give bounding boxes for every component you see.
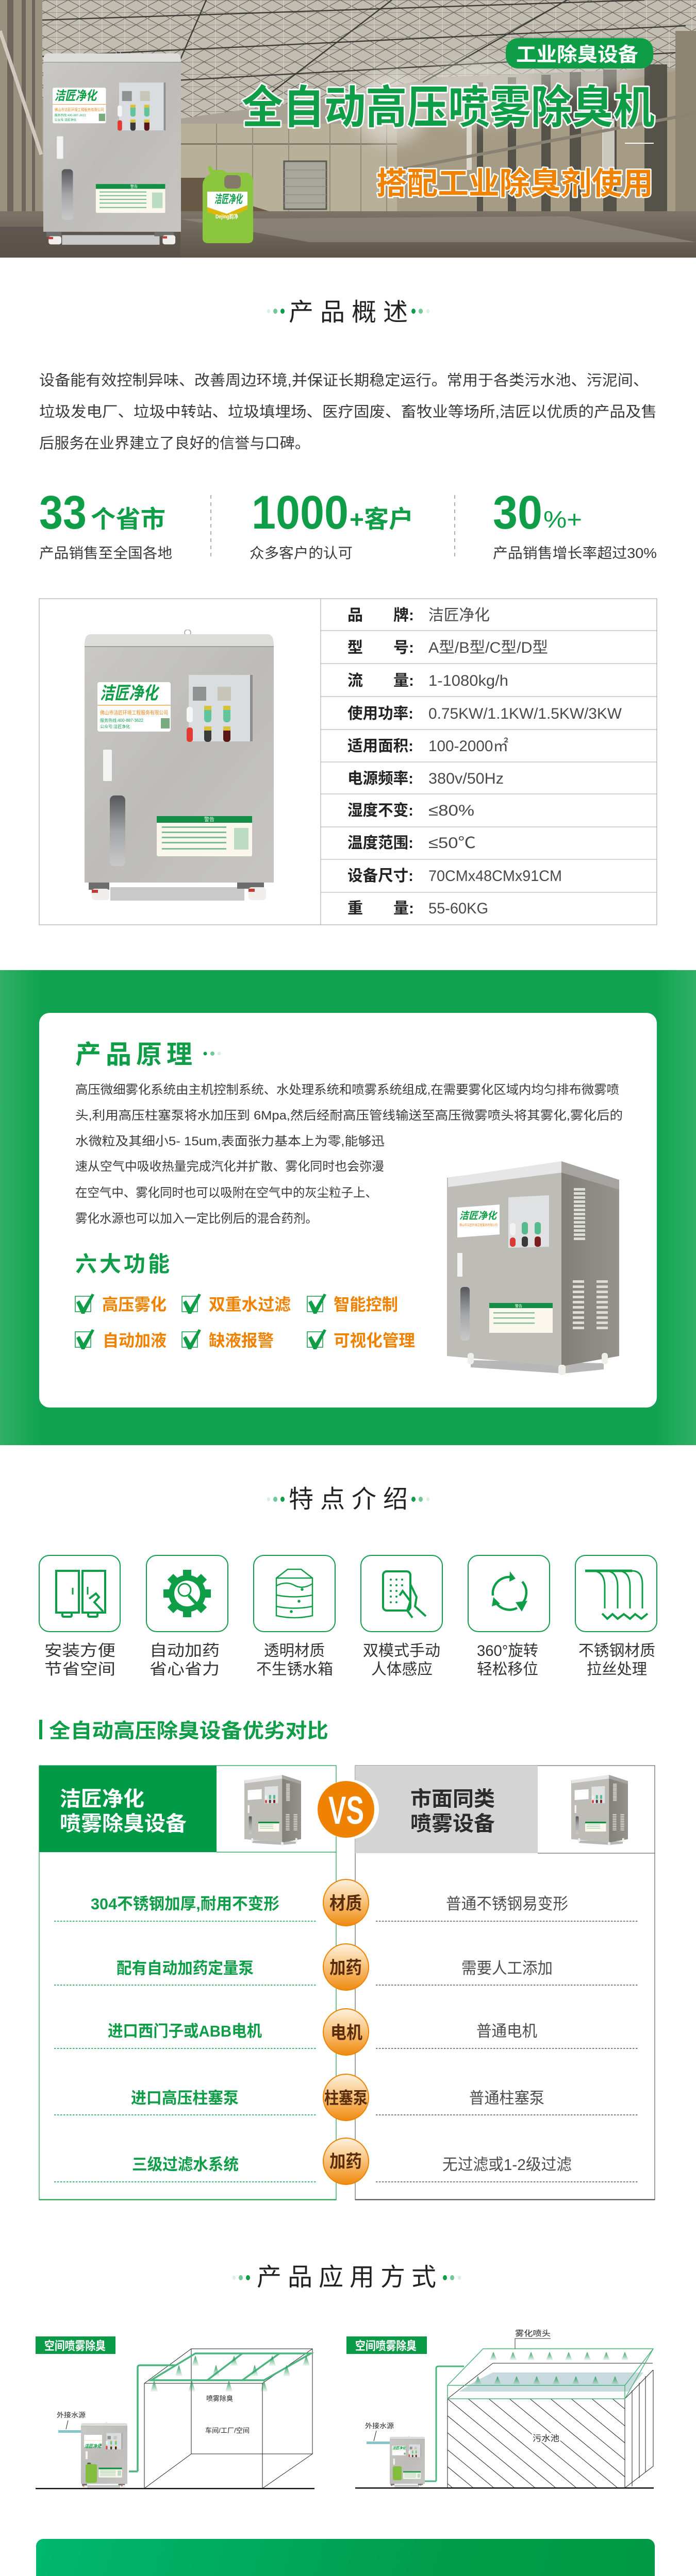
- principle heading: 产品原理: [75, 1040, 197, 1069]
- stat: 30% growth: %+: [543, 506, 582, 533]
- spec rows: 品: [347, 607, 363, 624]
- spec machine photo: 公众号:洁匠净化: [100, 724, 130, 729]
- spec rows: ≤50℃: [428, 835, 476, 852]
- spec rows: 适用面积:: [347, 738, 413, 755]
- overview paragraph: [39, 372, 657, 452]
- stat: 1000+ customers: [250, 486, 413, 561]
- function checklist: 缺液报警: [209, 1331, 274, 1350]
- comparison: market column: [355, 1766, 655, 2200]
- tag: industrial deodorizing equipment: [506, 38, 653, 69]
- spec rows: A型/B型/C型/D型: [428, 639, 548, 656]
- spec rows: 1-1080kg/h: [428, 672, 508, 689]
- spec rows: 号:: [393, 639, 414, 656]
- badges: comparison categories: 加药: [329, 1958, 362, 1978]
- feature: 360 rotation: 轻松移位: [477, 1661, 538, 1678]
- function checklist: [75, 1294, 415, 1350]
- spec rows: 电源频率:: [347, 770, 413, 787]
- badges: comparison categories: 加药: [329, 2152, 362, 2172]
- hero bottle: 洁匠净化: [214, 193, 243, 206]
- diagram: workshop space spraying: 洁匠净化: [85, 2444, 102, 2449]
- comparison: our column: 304不锈钢加厚,耐用不变形: [91, 1895, 279, 1913]
- comparison: our column: 喷雾除臭设备: [60, 1812, 187, 1835]
- diagram: sewage tank spraying: 外接水源: [365, 2422, 394, 2430]
- stat: 1000+ customers: 1000: [252, 486, 349, 539]
- principle paragraph: 雾化水源也可以加入一定比例后的混合药剂。: [75, 1212, 318, 1226]
- diagram: sewage tank spraying: 污水池: [533, 2434, 559, 2443]
- principle paragraph: 头,利用高压柱塞泵将水加压到 6Mpa,然后经耐高压管线输送至高压微雾喷头将其雾化,雾化后的: [75, 1109, 623, 1123]
- spec rows: 55-60KG: [428, 900, 488, 917]
- feature: transparent tank: [254, 1555, 335, 1678]
- spec machine photo: 服务热线:400-887-3622: [100, 718, 144, 723]
- comparison: market column: 普通柱塞泵: [469, 2089, 544, 2107]
- badges: comparison categories: 材质: [329, 1894, 362, 1913]
- principle machine photo: 洁匠净化: [459, 1210, 498, 1222]
- feature: automatic dosing: [146, 1555, 228, 1678]
- feature: automatic dosing: 自动加药: [150, 1642, 220, 1659]
- comparison: market column: 市面同类: [410, 1788, 495, 1810]
- six functions heading: 六大功能: [75, 1252, 172, 1276]
- principle paragraph: 在空气中、雾化同时也可以吸附在空气中的灰尘粒子上、: [75, 1186, 377, 1200]
- spec rows: 0.75KW/1.1KW/1.5KW/3KW: [428, 705, 622, 722]
- stat: 33 provinces: [39, 486, 172, 561]
- function checklist: 高压雾化: [102, 1295, 167, 1314]
- hero machine: [43, 50, 181, 245]
- feature: stainless steel: [575, 1555, 657, 1678]
- spec machine photo: 洁匠净化: [100, 684, 160, 703]
- hero machine: 服务热线:400-887-3622: [55, 113, 86, 117]
- feature: easy installation: 安装方便: [44, 1642, 115, 1659]
- comparison: market column: 普通不锈钢易变形: [446, 1895, 568, 1913]
- hero bottle: Dejing韵净: [216, 213, 238, 220]
- section: features, comparison and application: [36, 1486, 657, 2489]
- function checklist: 双重水过滤: [209, 1295, 291, 1314]
- heading: features: 特点介绍: [289, 1486, 415, 1513]
- function checklist: 自动加液: [103, 1331, 167, 1350]
- feature: easy installation: [39, 1555, 120, 1678]
- spec machine photo: 佛山市洁匠环境工程服务有限公司: [100, 709, 168, 716]
- section: hero, overview and principle: [0, 0, 696, 1445]
- principle machine photo: 警告: [515, 1303, 522, 1308]
- icon: rotation arrows: [492, 1571, 527, 1612]
- function checklist: 智能控制: [334, 1295, 398, 1314]
- diagram: sewage tank spraying: 雾化喷头: [515, 2329, 551, 2338]
- feature: 360 rotation: [468, 1555, 550, 1678]
- comparison: market column: 普通电机: [476, 2022, 537, 2040]
- spec rows: 量:: [393, 900, 414, 917]
- principle paragraph: 水微粒及其细小5- 15um,表面张力基本上为零,能够迅: [75, 1134, 385, 1148]
- spec rows: 380v/50Hz: [428, 770, 504, 787]
- tank hatching: [448, 2399, 625, 2487]
- spec machine photo: [85, 630, 274, 901]
- function checklist: 可视化管理: [334, 1331, 415, 1350]
- principle paragraph: [75, 1083, 623, 1226]
- feature: transparent tank: 透明材质: [264, 1642, 325, 1659]
- principle machine photo: 佛山市洁匠环境工程服务有限公司: [459, 1223, 498, 1227]
- spec rows: 流: [347, 672, 363, 689]
- stat: 1000+ customers: +客户: [350, 505, 413, 533]
- hero factory background: [0, 0, 696, 258]
- comparison: market column: 喷雾设备: [410, 1812, 495, 1835]
- overview paragraph: 垃圾发电厂、垃圾中转站、垃圾填埋场、医疗固废、畜牧业等场所,洁匠以优质的产品及售: [39, 403, 657, 420]
- icon: cabinet with wrench: [56, 1571, 105, 1617]
- icon: hand on keypad: [383, 1571, 426, 1618]
- comparison: our column: 进口西门子或ABB电机: [108, 2022, 262, 2040]
- spec rows: 100-2000㎡: [428, 738, 508, 755]
- overview paragraph: 后服务在业界建立了良好的信誉与口碑。: [39, 435, 310, 452]
- feature: easy installation: 节省空间: [44, 1661, 115, 1678]
- spec rows: 设备尺寸:: [347, 868, 413, 885]
- heading: application method: 产品应用方式: [257, 2264, 442, 2291]
- hero machine: 公众号:洁匠净化: [55, 117, 76, 122]
- hero machine: 警告: [130, 184, 138, 189]
- diagram: workshop space spraying: 外接水源: [57, 2411, 86, 2419]
- hero machine: 洁匠净化: [55, 89, 98, 103]
- hero bottle: [203, 166, 253, 243]
- stat: 33 provinces: 产品销售至全国各地: [39, 545, 172, 561]
- spec rows: 使用功率:: [347, 705, 413, 722]
- comparison: market column: 无过滤或1-2级过滤: [442, 2156, 572, 2174]
- heading: product overview: 产品概述: [289, 299, 415, 326]
- stat: 1000+ customers: 众多客户的认可: [250, 545, 353, 561]
- feature: dual mode: [361, 1555, 442, 1678]
- comparison: market column: 需要人工添加: [461, 1959, 553, 1977]
- spec rows: [347, 607, 622, 917]
- diagram: workshop space spraying: [36, 2336, 314, 2489]
- stat: 30% growth: [493, 486, 657, 561]
- VS badge: [318, 1780, 379, 1839]
- stat: 33 provinces: 33: [39, 486, 87, 539]
- icon: gear with magnifier: [163, 1570, 211, 1617]
- spec rows: 70CMx48CMx91CM: [428, 868, 562, 885]
- stat: 30% growth: 产品销售增长率超过30%: [493, 545, 657, 561]
- spec rows: ≤80%: [428, 802, 474, 819]
- diagram: workshop space spraying: 喷雾除臭: [206, 2395, 233, 2402]
- comparison: our column: [39, 1766, 336, 2200]
- principle paragraph: 高压微细雾化系统由主机控制系统、水处理系统和喷雾系统组成,在需要雾化区域内均匀排布微雾喷: [75, 1083, 619, 1097]
- spec rows: 量:: [393, 672, 414, 689]
- hero title: 全自动高压喷雾除臭机: [242, 82, 655, 133]
- feature: transparent tank: 不生锈水箱: [256, 1661, 333, 1678]
- our machine: [244, 1775, 301, 1845]
- panel: installation wiring: [36, 2539, 655, 2576]
- comparison: our column: 洁匠净化: [60, 1788, 144, 1810]
- badges: comparison categories: 柱塞泵: [324, 2089, 368, 2107]
- diagram: workshop space spraying: 空间喷雾除臭: [44, 2339, 106, 2352]
- spec rows: 重: [347, 900, 363, 917]
- feature: dual mode: 人体感应: [371, 1661, 433, 1678]
- principle machine photo: [447, 1161, 619, 1375]
- feature: stainless steel: 拉丝处理: [587, 1661, 647, 1678]
- principle paragraph: 速从空气中吸收热量完成汽化并扩散、雾化同时也会弥漫: [75, 1160, 384, 1174]
- diagram: sewage tank spraying: [344, 2329, 696, 2488]
- comparison: our column: 配有自动加药定量泵: [117, 1959, 254, 1977]
- icon: brushed steel pipes: [585, 1571, 648, 1619]
- market machine: [571, 1775, 628, 1845]
- panel: product principle: [0, 970, 696, 1445]
- diagram: sewage tank spraying: 洁匠净化: [392, 2446, 406, 2450]
- hero subtitle: 搭配工业除臭剂使用: [376, 166, 653, 201]
- feature: stainless steel: 不锈钢材质: [578, 1642, 655, 1659]
- spec rows: 型: [347, 639, 363, 656]
- overview paragraph: 设备能有效控制异味、改善周边环境,并保证长期稳定运行。常用于各类污水池、污泥间、: [39, 372, 649, 389]
- hero banner: [0, 0, 696, 258]
- feature: automatic dosing: 省心省力: [150, 1661, 220, 1678]
- stat: 30% growth: 30: [493, 486, 542, 539]
- spec rows: 洁匠净化: [428, 607, 490, 624]
- hero machine: 佛山市洁匠环境工程服务有限公司: [55, 108, 104, 112]
- badges: comparison categories: [323, 1879, 369, 2184]
- VS badge: VS: [328, 1789, 364, 1833]
- diagram: workshop space spraying: 车间/工厂/空间: [205, 2427, 250, 2434]
- feature: dual mode: 双模式手动: [363, 1642, 440, 1659]
- stat: 33 provinces: 个省市: [91, 505, 165, 533]
- spec rows: 湿度不变:: [347, 802, 413, 819]
- heading: comparison: 全自动高压除臭设备优劣对比: [49, 1720, 328, 1742]
- spec rows: 温度范围:: [347, 835, 413, 852]
- diagram: sewage tank spraying: 空间喷雾除臭: [355, 2339, 417, 2352]
- tag: industrial deodorizing equipment: 工业除臭设备: [516, 44, 638, 66]
- comparison: our column: 三级过滤水系统: [132, 2156, 239, 2174]
- section: installation wiring: [36, 2539, 655, 2576]
- spec rows: 牌:: [393, 607, 414, 624]
- spec machine photo: 警告: [204, 816, 214, 823]
- badges: comparison categories: 电机: [330, 2023, 362, 2043]
- feature: 360 rotation: 360°旋转: [477, 1642, 538, 1659]
- icon: water tank: [276, 1569, 312, 1618]
- specification table: [39, 599, 657, 925]
- comparison: our column: 进口高压柱塞泵: [131, 2089, 239, 2107]
